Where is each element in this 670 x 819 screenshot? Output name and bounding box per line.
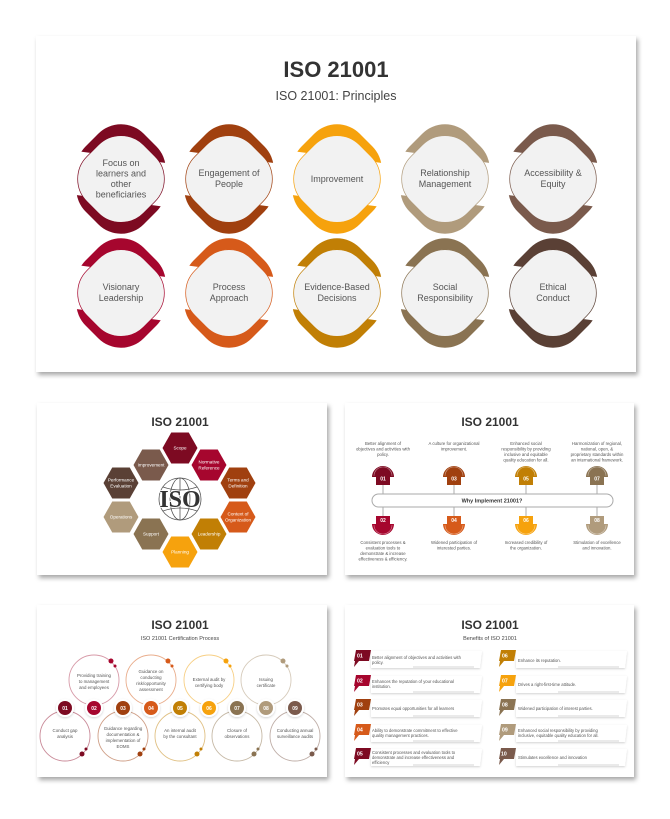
benefit texts: inclusive, equitable quality education for all. (518, 733, 599, 738)
top texts: demonstrate & increase (360, 551, 406, 556)
step texts: Closure of (227, 728, 248, 733)
top texts: Enhanced social (510, 441, 542, 446)
benefit texts: Enhance its reputation. (518, 658, 561, 663)
step texts: to management (79, 679, 110, 684)
top texts: objectives and activities with (356, 446, 411, 452)
benefit texts: Promotes equal opportunities for all learners (372, 706, 454, 711)
panel: why implement slide (345, 403, 634, 575)
icon: ISO logo (159, 478, 201, 520)
hex: Normative Reference (192, 450, 226, 480)
step texts: Guidance on (139, 669, 164, 674)
top texts: evaluation tools to (366, 546, 401, 550)
benefit badges: 03 (357, 702, 363, 708)
heading: ISO 21001 (461, 618, 519, 632)
top texts: and innovation. (582, 546, 612, 550)
hex: Planning (162, 536, 198, 568)
principle: Improvement: Improvement (311, 174, 364, 184)
principle: Visionary Leadership: Visionary (103, 282, 140, 292)
principle: Ethical Conduct: Ethical (539, 282, 567, 292)
principle: Focus on learners: beneficiaries (96, 190, 147, 200)
hex: Context of Organization: Organization (225, 518, 251, 522)
central bar: Why Implement 21001? (462, 498, 523, 504)
benefit texts: policy. (372, 660, 384, 665)
principle: Process Approach (184, 238, 274, 348)
benefit texts: Drives a right-first-time attitude. (518, 682, 576, 687)
step texts: assessment (139, 687, 163, 692)
step texts: Issuing (259, 677, 274, 682)
benefit texts (372, 655, 599, 765)
hex: Terms and Definition: Definition (228, 484, 248, 488)
badges top: 06 (523, 518, 529, 524)
number circles: 01 (62, 706, 68, 712)
top texts: Harmonization of regional, (572, 441, 622, 446)
top texts: Stimulation of excellence (573, 540, 621, 545)
principle: Visionary Leadership: Leadership (99, 293, 143, 303)
principle: Relationship Management (400, 124, 490, 234)
step texts: Providing training (77, 673, 112, 678)
number circles: 07 (234, 706, 240, 712)
hex: Context of Organization (220, 502, 256, 532)
benefit texts: efficiency (372, 760, 390, 765)
hex: Operations: Operations (110, 514, 133, 520)
principle: Focus on learners (76, 124, 166, 234)
hex: Terms and Definition: Terms and (227, 478, 249, 482)
hex: Scope (162, 432, 198, 464)
step texts: analysis (57, 734, 74, 739)
top texts: interested parties. (437, 546, 471, 550)
heading: ISO 21001 (151, 415, 209, 429)
top texts: A culture for organizational (429, 441, 479, 446)
benefit badges: 02 (357, 678, 363, 684)
subtitle: ISO 21001: Principles (276, 89, 396, 103)
top texts: responsibility by providing (501, 446, 551, 452)
principle: Accessibility & Equity: Equity (540, 179, 566, 189)
number circles: 05 (177, 706, 183, 712)
benefit texts: Enhanced social responsibility by providing (518, 728, 599, 733)
step texts: EOMS (117, 744, 130, 749)
step texts: risk/opportunity (136, 681, 167, 686)
central bar (372, 494, 613, 507)
title: ISO 21001 (283, 57, 389, 82)
principle: Focus on learners: other (111, 179, 131, 189)
benefit texts: Widened participation of interest parties. (518, 706, 593, 711)
step texts: Conducting annual (277, 728, 313, 733)
hex: Scope: Scope (173, 446, 187, 450)
top texts: the organization. (510, 546, 542, 550)
step texts: certifying body (195, 683, 224, 688)
principle: Social Responsibility (400, 238, 490, 348)
benefit texts: Ability to demonstrate commitment to effective (372, 728, 458, 733)
hex: Support: Support (143, 532, 160, 536)
principle: Engagement of People: People (215, 179, 243, 189)
principle: Social Responsibility: Social (433, 282, 457, 292)
top texts (356, 441, 624, 562)
badges top: 05 (523, 476, 529, 482)
heading: ISO 21001 (151, 618, 209, 632)
hex: Context of Organization: Context of (228, 512, 249, 516)
badges top: 07 (594, 476, 600, 482)
principle: Relationship Management: Relationship (420, 168, 470, 178)
principle: Visionary Leadership (76, 238, 166, 348)
top texts: policy. (377, 452, 389, 457)
step texts: observations (225, 734, 250, 739)
top texts: Widened participation of (431, 540, 478, 545)
top texts: an international framework. (571, 458, 623, 462)
step texts: External audit by (193, 677, 226, 682)
top texts: quality education for all. (503, 458, 549, 462)
step texts: Conduct gap (53, 728, 78, 733)
hex: Planning: Planning (171, 550, 189, 554)
top texts: inclusive and equitable (504, 452, 548, 457)
badges top: 08 (594, 518, 600, 524)
benefit badges (354, 650, 516, 765)
step texts: certificate (257, 683, 276, 688)
principle: Focus on learners: learners and (96, 168, 146, 178)
step texts: and employees (79, 685, 110, 690)
top texts: Better alignment of (365, 441, 402, 446)
principle: Ethical Conduct (508, 238, 598, 348)
benefit badges: 10 (501, 752, 507, 758)
step texts: implementation of (106, 738, 141, 743)
principle: Evidence-Based Decisions (292, 238, 382, 348)
panel: benefits slide: Benefits of ISO 21001 (463, 636, 517, 642)
top texts: effectiveness & efficiency. (359, 556, 407, 562)
benefit texts: Enhances the reputation of your educational (372, 679, 454, 684)
step texts (53, 669, 314, 749)
cards (371, 651, 627, 766)
panel: benefits slide (345, 605, 634, 777)
badges top: 02 (380, 518, 386, 524)
benefit badges: 05 (357, 752, 363, 758)
hex: Leadership: Leadership (198, 532, 221, 536)
hex: Normative Reference: Normative (199, 460, 220, 464)
badges top: 04 (451, 518, 457, 524)
badges top: 01 (380, 476, 386, 482)
big circles (40, 655, 320, 761)
principle: Engagement of People (184, 124, 274, 234)
principle: Process Approach: Approach (210, 293, 248, 303)
number circles: 02 (91, 706, 97, 712)
hex: Performance Evaluation: Performance (108, 478, 135, 482)
top texts: Consistent processes & (360, 540, 406, 545)
principle: Evidence-Based Decisions: Evidence-Based (304, 282, 370, 292)
principle: Process Approach: Process (213, 282, 246, 292)
hex: Leadership (192, 518, 226, 550)
principle: Evidence-Based Decisions: Decisions (317, 293, 357, 303)
top texts: improvement. (441, 446, 467, 452)
benefit texts: demonstrate and increase effectiveness and (372, 755, 455, 760)
benefit badges: 08 (502, 702, 508, 708)
principle: Social Responsibility: Responsibility (417, 293, 473, 303)
panel: hexagon clauses slide (37, 403, 327, 575)
step texts: surveillance audits (277, 734, 314, 739)
number circles: 03 (120, 706, 126, 712)
principle: Engagement of People: Engagement of (198, 168, 260, 178)
step texts: Guidance regarding (104, 726, 143, 731)
panel: main principles slide (36, 36, 636, 372)
badges top (372, 466, 608, 535)
principle: Accessibility & Equity: Accessibility & (524, 168, 582, 178)
benefit badges: 09 (502, 728, 508, 734)
benefit texts: Stimulates excellence and innovation (518, 755, 588, 760)
number circles: 04 (148, 706, 154, 712)
heading: ISO 21001 (461, 415, 519, 429)
icon: ISO logo: ISO (159, 487, 201, 513)
principle: Relationship Management: Management (419, 179, 472, 189)
hex: Improvement (134, 450, 168, 480)
panel: certification process slide: ISO 21001 Certification Process (141, 636, 219, 642)
benefit badges: 04 (357, 728, 363, 734)
number circles: 08 (263, 706, 269, 712)
step texts: by the consultant (163, 734, 197, 739)
hex: Normative Reference: Reference (198, 466, 220, 470)
hex: Performance Evaluation (104, 468, 138, 498)
number circles: 09 (292, 706, 298, 712)
top texts: national, open, & (581, 446, 613, 452)
panel: certification process slide (37, 605, 327, 777)
badges top: 03 (451, 476, 457, 482)
hex: Support (134, 518, 168, 550)
hex: Terms and Definition (220, 468, 256, 498)
step texts: documentation & (107, 732, 140, 737)
hex: Improvement: Improvement (138, 462, 165, 468)
benefit texts: Consistent processes and evaluation tools to (372, 750, 456, 755)
benefit badges: 06 (502, 654, 508, 660)
principle: Ethical Conduct: Conduct (536, 293, 570, 303)
benefit badges: 07 (502, 678, 508, 684)
number circles (56, 699, 304, 717)
number circles: 06 (206, 706, 212, 712)
top texts: proprietary standards within (571, 452, 624, 457)
connectors (383, 484, 597, 517)
top texts: Increased credibility of (505, 540, 548, 545)
step texts: An internal audit (164, 728, 197, 733)
principle: Accessibility & Equity (508, 124, 598, 234)
benefit texts: institution. (372, 684, 391, 689)
principle: Focus on learners: Focus on (102, 158, 140, 168)
principle: Improvement (292, 124, 382, 234)
benefit texts: Better alignment of objectives and activities with (372, 655, 462, 660)
benefit texts: quality management practices. (372, 733, 429, 738)
hex: Operations (104, 502, 138, 532)
decorative dots (80, 658, 318, 756)
hex: Performance Evaluation: Evaluation (110, 484, 132, 488)
benefit badges: 01 (357, 654, 363, 660)
step texts: conducting (140, 675, 162, 680)
